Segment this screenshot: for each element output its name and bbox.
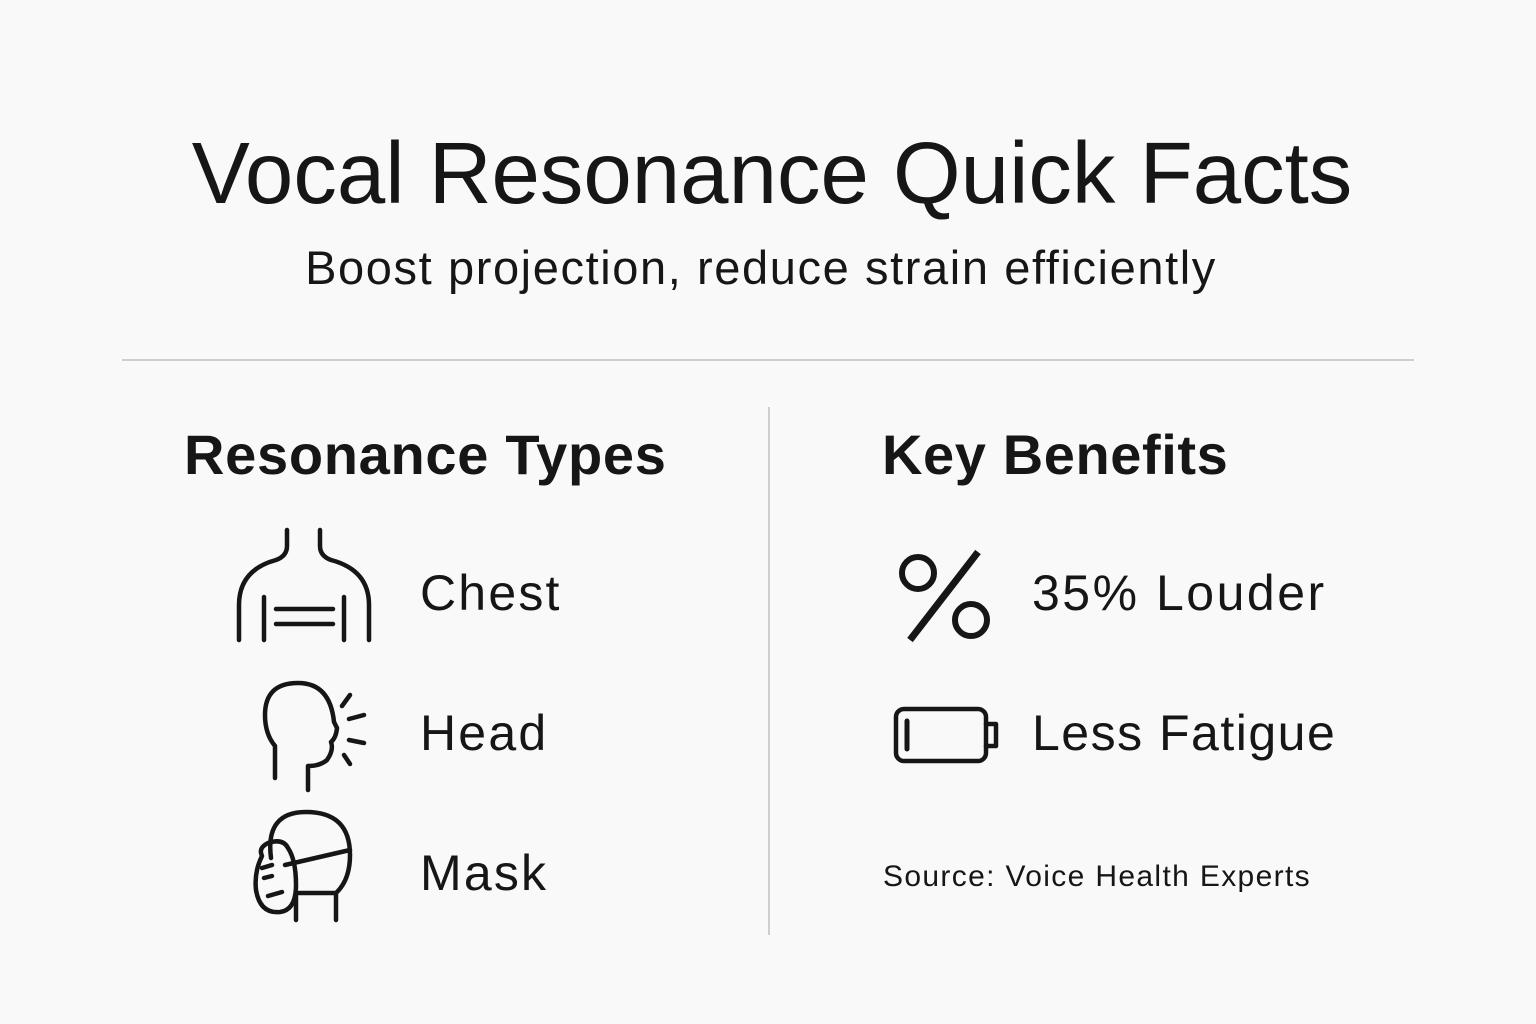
icon: head [265,683,364,790]
title: Vocal Resonance Quick Facts [192,125,1352,222]
label: louder: 35% Louder [1032,565,1327,621]
source: Source: Voice Health Experts [883,860,1311,893]
label: less fatigue: Less Fatigue [1032,705,1336,761]
icon: percent [902,552,987,640]
heading: resonance types: Resonance Types [184,423,667,486]
label: head: Head [420,705,548,761]
heading: key benefits: Key Benefits [882,423,1228,486]
label: chest: Chest [420,565,562,621]
label: mask: Mask [420,845,548,901]
icon: chest [239,530,369,640]
icon: battery [896,709,996,761]
subtitle: Boost projection, reduce strain efficiently [305,241,1217,294]
icon: mask [256,812,350,920]
